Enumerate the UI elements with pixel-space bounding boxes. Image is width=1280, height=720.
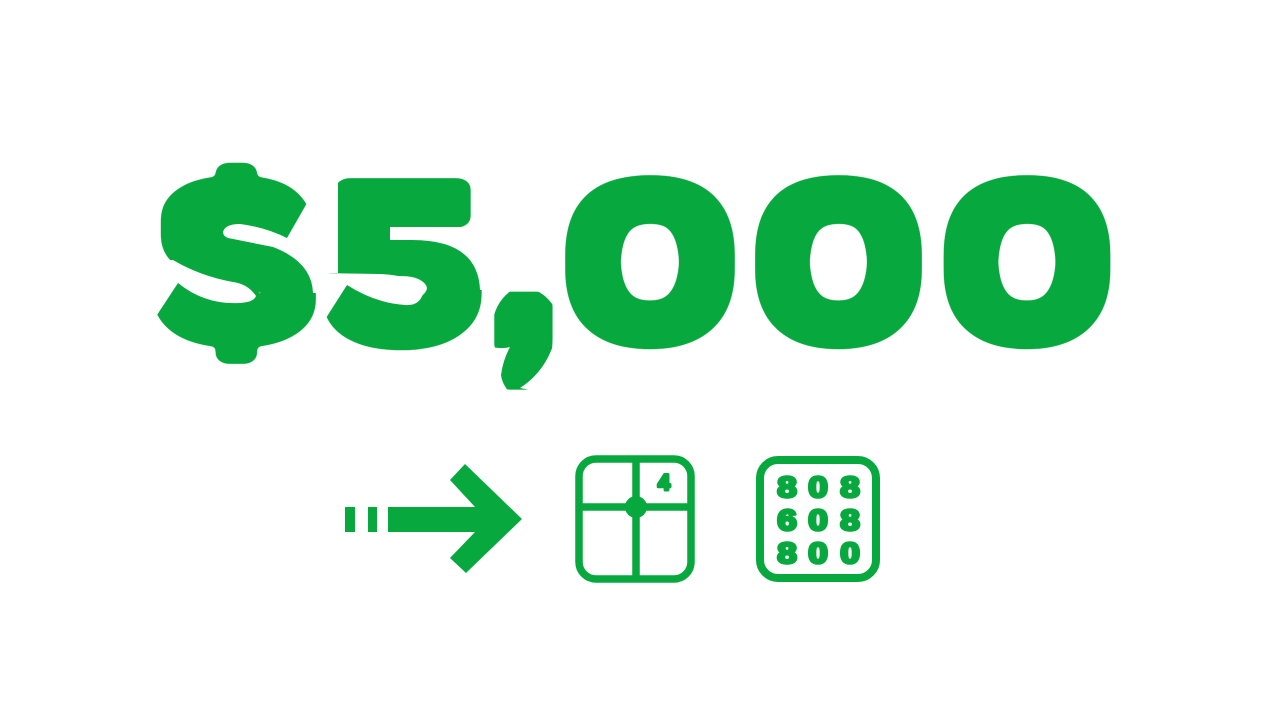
icon: nine-cell number grid: 8 [777,471,797,503]
icon: nine-cell number grid: 8 [840,504,860,536]
icon: nine-cell number grid: 6 [777,504,797,536]
small digit in top-right pane: 4 [658,470,671,495]
title: large dollar amount: 0 [568,152,732,372]
title: large dollar amount: , [482,115,564,391]
icon: nine-cell number grid: 8 [777,537,797,569]
icon: nine-cell number grid: 0 [808,537,828,569]
icon: four-pane grid [579,459,691,579]
title: large dollar amount [130,115,1107,395]
title: large dollar amount: $ [163,146,307,376]
icon: nine-cell number grid: 8 [840,471,860,503]
arrow: dashed tail pointing right [345,464,522,573]
title: large dollar amount: 0 [947,152,1107,372]
icon: nine-cell number grid: 0 [808,504,828,536]
icon: nine-cell number grid [760,460,876,578]
icon: nine-cell number grid: 0 [808,471,828,503]
title: large dollar amount: 5 [327,153,479,373]
title: large dollar amount: 0 [758,152,919,372]
icon: nine-cell number grid: 0 [840,537,860,569]
